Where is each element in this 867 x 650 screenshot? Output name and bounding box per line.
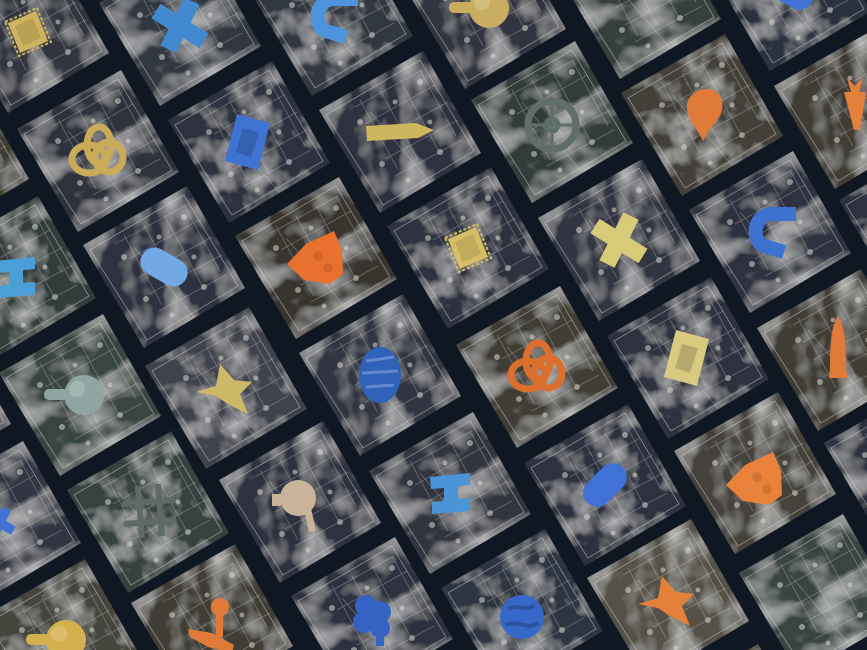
row 5 packets (0, 514, 867, 650)
row 0 packets (0, 0, 867, 113)
row 1 packets (0, 27, 867, 239)
row 4 packets (0, 384, 867, 603)
row 2 packets (0, 141, 867, 358)
row 3 packets (0, 269, 867, 484)
